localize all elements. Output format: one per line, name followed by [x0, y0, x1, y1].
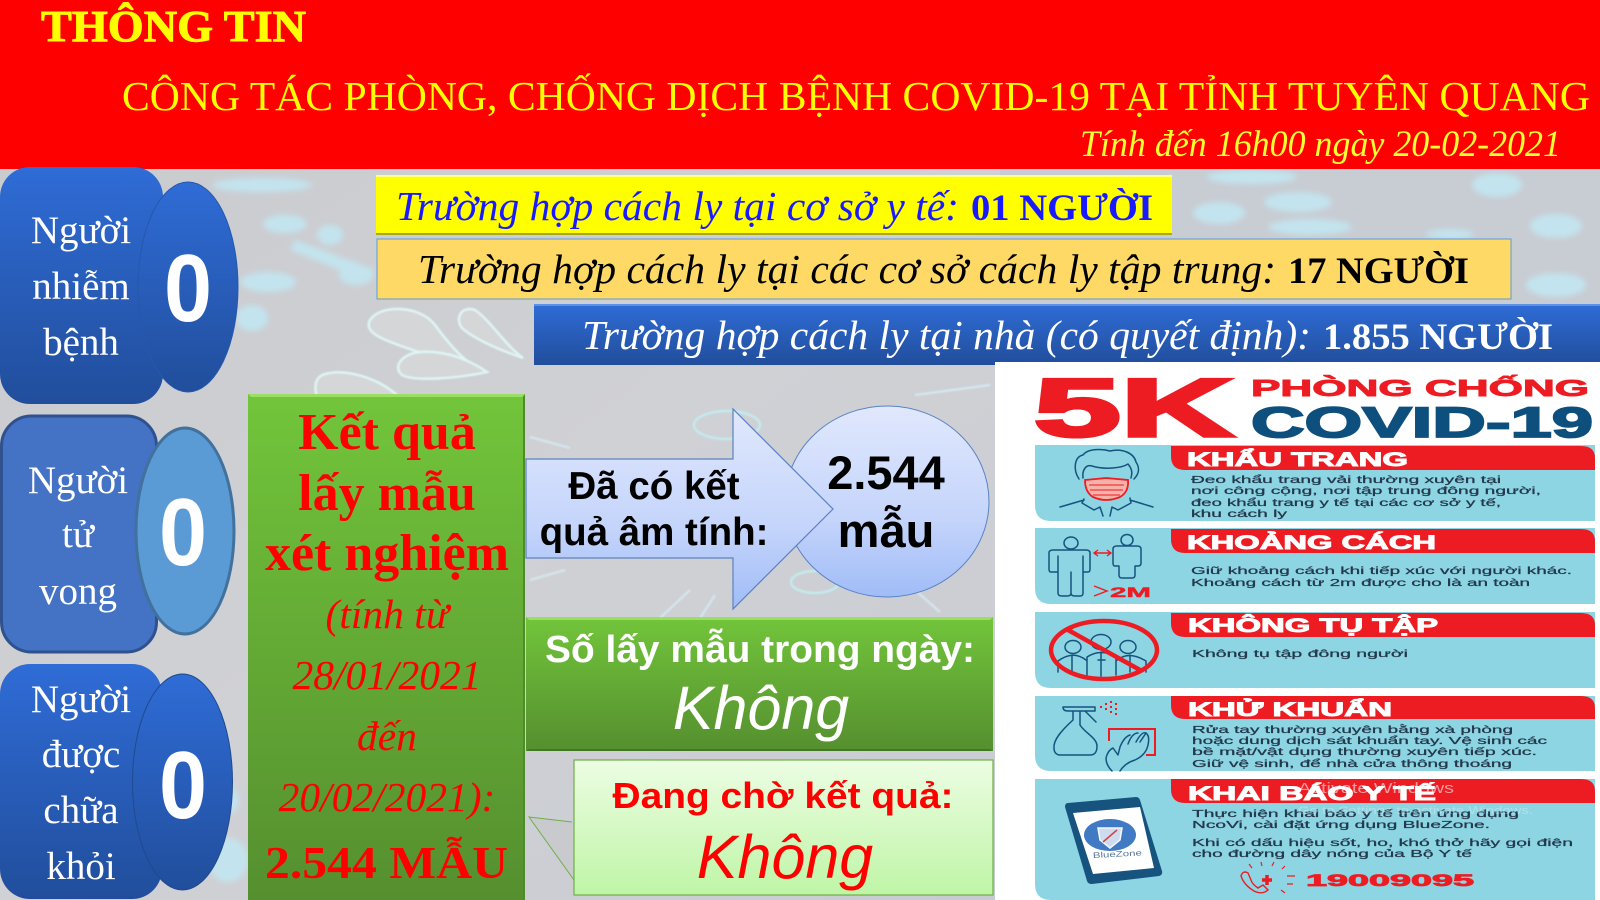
icon: two people apart — [1049, 534, 1151, 600]
banner: medical facility quarantine: 01 NGƯỜI — [971, 187, 1153, 229]
card: mask: khu cách ly — [1191, 508, 1288, 520]
arrow: negative results — [526, 409, 833, 609]
panel: samples today — [526, 617, 993, 751]
banner: concentrated quarantine: Trường hợp cách ly tại các cơ sở cách ly tập trung: — [418, 246, 1276, 292]
oval: recovered value: 0 — [159, 732, 207, 839]
oval: deaths value: 0 — [159, 479, 207, 586]
circle: negative count: 2.544 — [827, 446, 945, 499]
label: deaths: vong — [39, 570, 117, 613]
card: disinfection: bề mặt/vật dụng thường xuyên tiếp xúc. — [1192, 746, 1537, 758]
poster title: 5K: 5K — [1034, 363, 1233, 454]
label: recovered: Người — [31, 678, 131, 721]
card: no gatherings: Không tụ tập đông người — [1192, 648, 1408, 660]
heading: results: xét nghiệm — [265, 525, 509, 582]
circle: negative count: mẫu — [838, 504, 934, 557]
date range: 28/01/2021 — [292, 652, 482, 698]
watermark: activate windows: Activate Windows — [1298, 780, 1454, 797]
panel: infected count — [0, 167, 238, 404]
panel: recovered count — [0, 664, 232, 899]
banner: medical facility quarantine: Trường hợp cách ly tại cơ sở y tế: — [396, 183, 959, 229]
card: mask: nơi công cộng, nơi tập trung đông người, — [1191, 485, 1541, 497]
label: deaths: tử — [62, 513, 96, 556]
banner: home quarantine: Trường hợp cách ly tại nhà (có quyết định): — [582, 312, 1311, 358]
panel: 5K poster — [995, 362, 1600, 900]
card: mask: KHẨU TRANG — [1187, 449, 1408, 471]
icon: face mask — [1060, 450, 1153, 516]
card: disinfection: KHỬ KHUẨN — [1188, 699, 1392, 721]
card: distance — [1035, 528, 1595, 604]
label: recovered: được — [42, 733, 120, 776]
card: distance: KHOẢNG CÁCH — [1187, 532, 1436, 554]
icon: phone with BlueZone: BlueZone — [1093, 848, 1143, 860]
label: infected: Người — [31, 209, 131, 252]
panel: test sampling results — [248, 394, 525, 900]
card: disinfection: Giữ vệ sinh, để nhà cửa thông thoáng — [1192, 758, 1512, 770]
poster subtitle: COVID-19: COVID-19 — [1251, 399, 1593, 447]
poster subtitle: prevention: PHÒNG CHỐNG — [1251, 374, 1589, 401]
icon: no crowd — [1051, 621, 1157, 679]
card: no gatherings: KHÔNG TỤ TẬP — [1188, 615, 1439, 637]
watermark: activate windows: Go to Settings to activate Windows. — [1298, 805, 1533, 817]
callout: awaiting results: Đang chờ kết quả: — [612, 775, 954, 816]
date range: đến — [357, 713, 417, 759]
arrow: negative results: Đã có kết — [568, 465, 740, 508]
card: no gatherings — [1035, 612, 1595, 688]
banner: home quarantine — [534, 304, 1600, 365]
panel: samples today: Số lấy mẫu trong ngày: — [545, 627, 975, 671]
subtitle: CÔNG TÁC PHÒNG, CHỐNG DỊCH BỆNH COVID-19 TẠI TỈNH TUYÊN QUANG — [122, 73, 1590, 119]
card: health declaration: KHAI BÁO Y TẾ — [1188, 783, 1436, 805]
card: health declaration — [1035, 779, 1595, 900]
banner: concentrated quarantine: 17 NGƯỜI — [1288, 250, 1469, 292]
card: distance: Giữ khoảng cách khi tiếp xúc với người khác. — [1191, 565, 1572, 577]
header band — [0, 0, 1600, 169]
date range: (tính từ — [326, 591, 452, 638]
card: health declaration: Thực hiện khai báo y tế trên ứng dụng — [1192, 808, 1519, 820]
heading: results: Kết quả — [298, 404, 476, 461]
panel: deaths count — [2, 416, 234, 652]
banner: home quarantine: 1.855 NGƯỜI — [1323, 316, 1553, 358]
label: infected: bệnh — [43, 321, 119, 364]
card: disinfection: Rửa tay thường xuyên bằng xà phòng — [1192, 723, 1513, 736]
date line: Tính đến 16h00 ngày 20-02-2021 — [1080, 124, 1561, 165]
icon: phone with BlueZone — [1065, 797, 1162, 884]
oval: deaths value — [136, 428, 234, 634]
icon: two people apart: 2M — [1110, 584, 1151, 600]
panel: samples today: Không — [673, 674, 849, 742]
circle: negative count — [785, 406, 989, 597]
icon: spray and hand — [1054, 702, 1155, 771]
watermark: activate windows — [1298, 780, 1533, 817]
label: recovered: chữa — [43, 789, 119, 832]
oval: infected value: 0 — [164, 235, 212, 342]
card: mask: Đeo khẩu trang vải thường xuyên tại — [1191, 474, 1501, 486]
card: mask — [1035, 445, 1595, 521]
card: health declaration: NcoVi, cài đặt ứng dụng BlueZone. — [1192, 819, 1490, 831]
hotline: 19009095 — [1306, 871, 1474, 890]
oval: recovered value — [132, 674, 232, 890]
arrow: negative results: quả âm tính: — [540, 511, 768, 554]
oval: infected value — [138, 182, 238, 392]
card: mask: đeo khẩu trang y tế tại các cơ sở y tế, — [1191, 497, 1501, 509]
label: infected: nhiễm — [32, 265, 130, 308]
card: distance: Khoảng cách từ 2m được cho là an toàn — [1191, 577, 1530, 589]
label: deaths: Người — [28, 459, 128, 502]
callout: awaiting results — [529, 760, 993, 895]
hotline — [1241, 862, 1474, 893]
card: health declaration: cho đường dây nóng của Bộ Y tế — [1192, 848, 1472, 860]
card: disinfection — [1035, 696, 1595, 771]
card: health declaration: Khi có dấu hiệu sốt, ho, khó thở hãy gọi điện — [1192, 837, 1573, 849]
heading: results: lấy mẫu — [298, 465, 476, 522]
label: recovered: khỏi — [46, 845, 116, 888]
date range: 20/02/2021): — [279, 774, 495, 821]
total samples: 2.544 MẪU — [265, 836, 508, 888]
card: disinfection: hoặc dung dịch sát khuẩn tay. Vệ sinh các — [1192, 735, 1547, 747]
callout: awaiting results: Không — [697, 823, 873, 891]
banner: medical facility quarantine — [376, 175, 1172, 235]
banner: concentrated quarantine — [377, 239, 1511, 299]
title: THÔNG TIN: THÔNG TIN — [41, 2, 306, 51]
